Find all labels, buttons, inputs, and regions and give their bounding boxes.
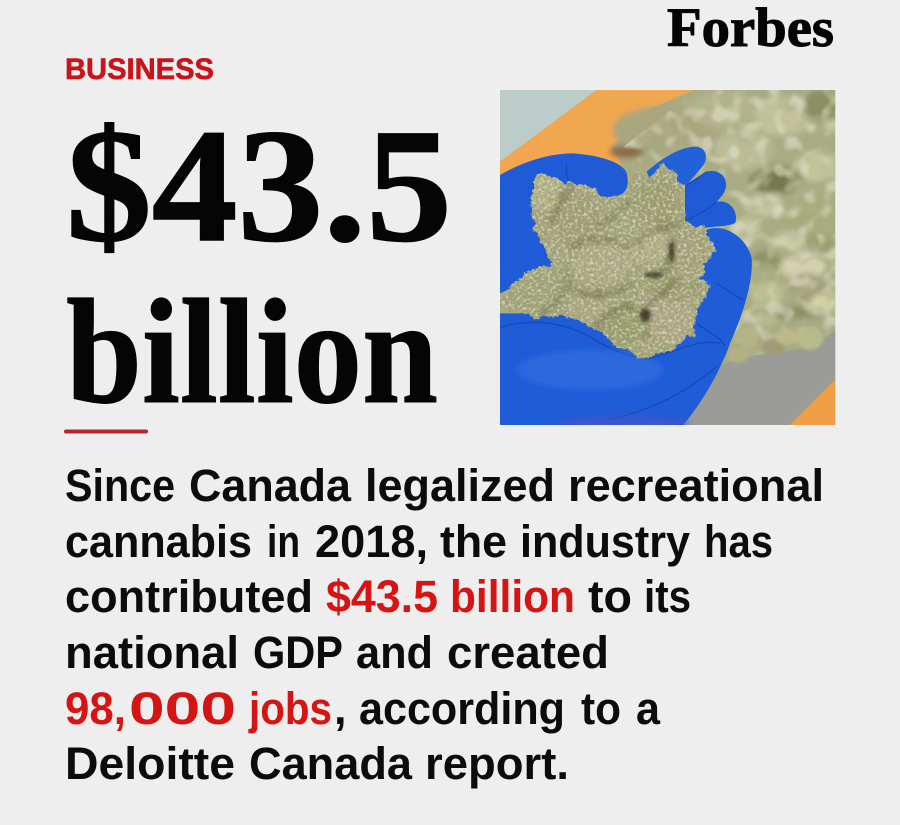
line 3 end: its	[644, 571, 691, 622]
red amount highlight: $43.5	[326, 571, 438, 622]
line 5 end: to	[581, 683, 621, 734]
blue glove: back fingers	[500, 147, 752, 425]
line 6	[65, 738, 569, 789]
red jobs highlight: 98,	[65, 683, 126, 734]
grey-blue table corner	[500, 90, 597, 162]
line 6: Canada	[249, 738, 413, 789]
line 3 end	[588, 571, 691, 622]
red accent rule	[64, 430, 148, 434]
headline unit: billion	[66, 269, 438, 435]
pile shadow mottling	[739, 103, 836, 324]
line 1	[65, 460, 824, 511]
bud highlights	[532, 175, 562, 212]
section label: BUSINESS: BUSINESS	[65, 53, 214, 86]
grey conveyor surface	[677, 330, 835, 425]
shadow between buds	[640, 242, 674, 322]
line 6: Deloitte	[65, 738, 235, 789]
line 2: in	[267, 516, 300, 567]
line 5 end: a	[636, 683, 661, 734]
red jobs highlight: jobs	[248, 683, 332, 734]
glove creases	[500, 163, 743, 420]
line 1: Canada	[189, 460, 352, 511]
red jobs highlight: 000	[129, 683, 236, 734]
line 3 start: contributed	[65, 571, 313, 622]
line 1: legalized	[365, 460, 555, 511]
red jobs highlight	[65, 683, 332, 734]
glove lower tint	[558, 414, 691, 425]
blurred pile of buds	[610, 90, 840, 327]
line 4: national	[65, 627, 239, 678]
line 4: created	[447, 627, 609, 678]
pile highlight mottling	[623, 90, 835, 363]
line 1: recreational	[568, 460, 824, 511]
line 2: cannabis	[65, 516, 252, 567]
photo: gloved hands holding cannabis buds	[500, 90, 840, 432]
line 4: and	[356, 627, 433, 678]
red amount highlight	[326, 571, 575, 622]
line 2: 2018,	[315, 516, 428, 567]
glove left thumb side	[500, 153, 628, 293]
line 2: has	[704, 516, 773, 567]
line 2: industry	[520, 516, 690, 567]
red amount highlight: billion	[450, 571, 575, 622]
orange tray	[500, 90, 693, 180]
palm and lower hand	[500, 228, 752, 425]
line 5 end: ,	[334, 683, 347, 734]
body paragraph	[65, 460, 824, 789]
line 6: report.	[425, 738, 569, 789]
line 5 end	[334, 683, 661, 734]
finger three	[684, 201, 736, 230]
line 4: GDP	[253, 627, 343, 678]
crevices between buds	[540, 187, 680, 340]
cannabis buds in hand	[500, 163, 716, 359]
finger one	[647, 147, 706, 185]
line 2	[65, 516, 773, 567]
line 5 end: according	[359, 683, 565, 734]
foreground blurred buds at pile edge	[728, 326, 823, 363]
finger two	[685, 171, 726, 222]
glove highlight	[517, 350, 663, 390]
photo backdrop	[500, 90, 835, 425]
line 4	[65, 627, 609, 678]
headline amount: $43.5	[66, 97, 452, 276]
orange tray corner	[790, 379, 835, 425]
line 3 end: to	[588, 571, 632, 622]
line 2: the	[440, 516, 507, 567]
line 1: Since	[65, 460, 175, 511]
headline	[66, 97, 452, 435]
